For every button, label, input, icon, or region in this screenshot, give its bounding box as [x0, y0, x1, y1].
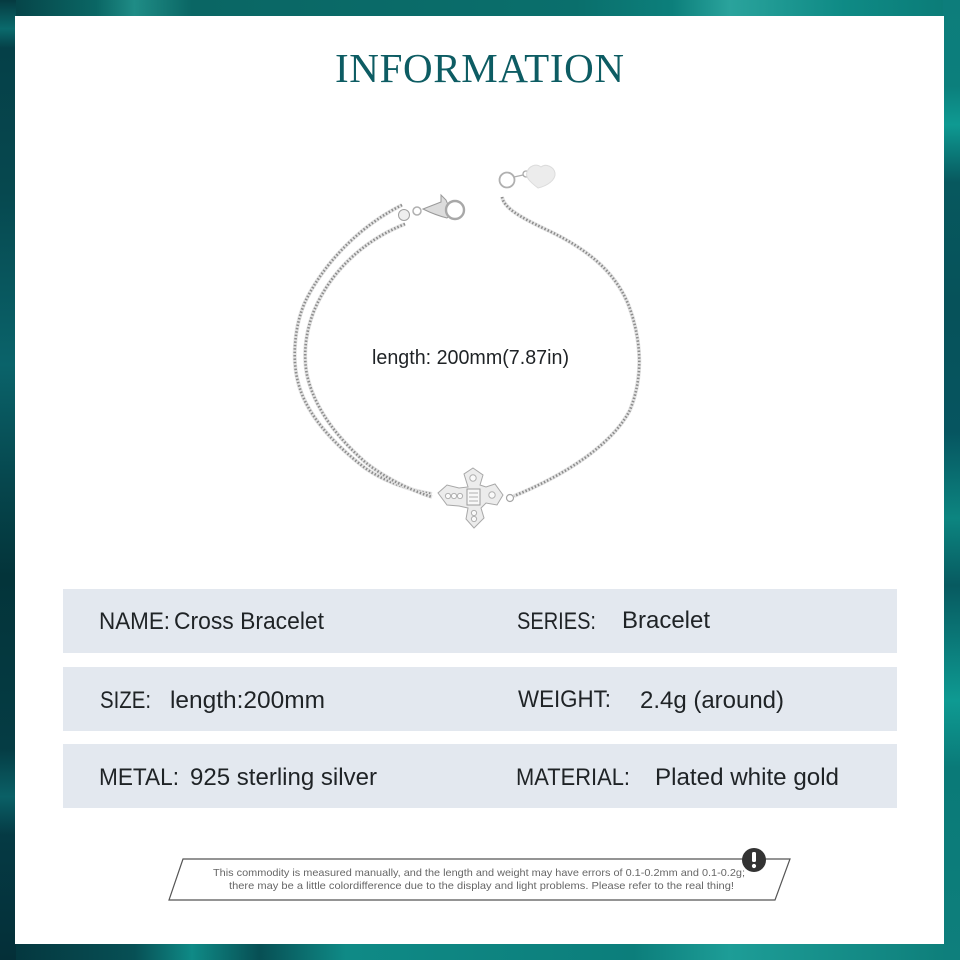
spec row: size and weight: SIZE:	[100, 687, 151, 714]
spec row: metal and material: METAL:	[99, 764, 179, 791]
spec row: size and weight: 2.4g (around)	[640, 687, 784, 714]
disclaimer box	[169, 848, 790, 900]
outer left chain	[295, 205, 432, 494]
length label: length: 200mm(7.87in)	[372, 347, 569, 369]
spec row: metal and material	[63, 744, 897, 808]
title: INFORMATION	[335, 45, 624, 91]
spec row: metal and material: Plated white gold	[655, 764, 839, 791]
right chain	[502, 197, 639, 496]
icon: warning	[742, 848, 766, 872]
spec row: name and series: SERIES:	[517, 608, 596, 635]
inner left chain	[305, 224, 432, 497]
spec row: name and series: NAME:	[99, 608, 170, 635]
disclaimer box: This commodity is measured manually, and the length and weight may have errors of 0.1-0.2mm and 0.1-0.2g;	[213, 867, 745, 879]
spec row: metal and material: MATERIAL:	[516, 764, 630, 791]
spec row: size and weight	[63, 667, 897, 731]
lobster clasp	[398, 195, 464, 220]
spec row: size and weight: WEIGHT:	[518, 686, 611, 713]
spec row: name and series	[63, 589, 897, 653]
spec row: name and series: Bracelet	[622, 607, 710, 634]
bracelet photo	[295, 165, 639, 528]
disclaimer box: there may be a little colordifference due to the display and light problems. Please refer to the real thing!	[229, 880, 734, 892]
ring and heart charm	[500, 165, 555, 188]
spec row: name and series: Cross Bracelet	[174, 608, 324, 635]
spec row: metal and material: 925 sterling silver	[190, 764, 377, 791]
spec row: size and weight: length:200mm	[170, 687, 325, 714]
cross pendant	[438, 468, 514, 528]
